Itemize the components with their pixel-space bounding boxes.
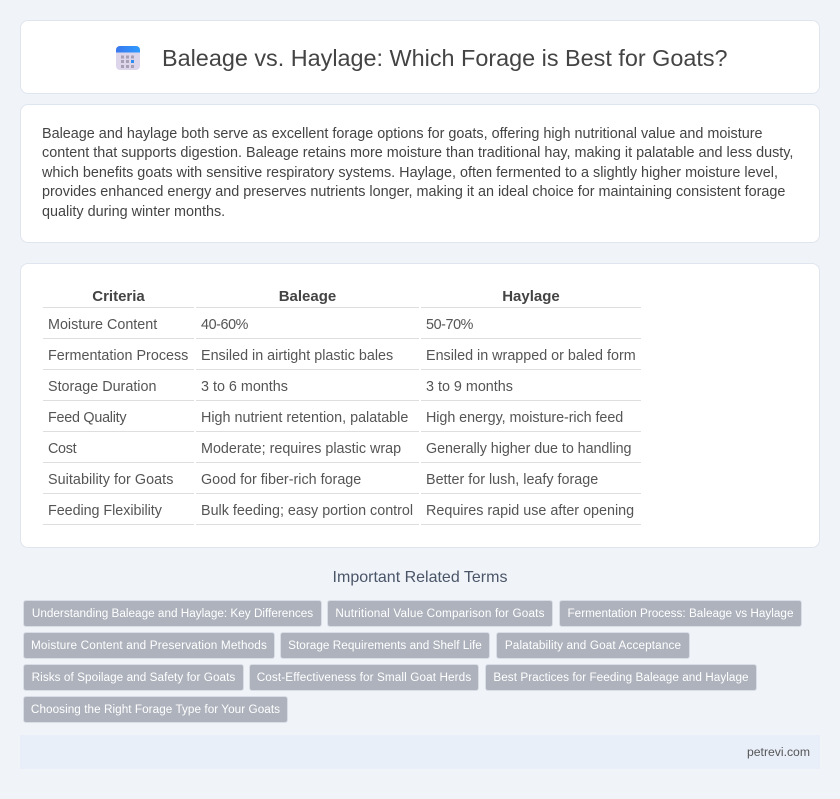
header panel bbox=[20, 20, 820, 94]
related term tags bbox=[23, 600, 802, 723]
comparison table: Feed Quality bbox=[48, 410, 126, 426]
comparison table: 40-60% bbox=[201, 317, 248, 333]
comparison table: Fermentation Process bbox=[48, 348, 188, 364]
panel: intro text bbox=[20, 104, 820, 243]
footer bar bbox=[20, 735, 820, 769]
related term tags: Cost-Effectiveness for Small Goat Herds bbox=[257, 671, 471, 684]
related term tags: Best Practices for Feeding Baleage and Haylage bbox=[493, 671, 749, 684]
intro paragraph: quality during winter months. bbox=[42, 204, 225, 220]
intro paragraph bbox=[42, 126, 793, 220]
comparison table: Cost bbox=[48, 441, 76, 457]
comparison table: Ensiled in wrapped or baled form bbox=[426, 348, 636, 364]
comparison table bbox=[43, 288, 641, 525]
heading: related terms: Important Related Terms bbox=[333, 569, 507, 586]
intro paragraph: Baleage and haylage both serve as excellent forage options for goats, offering high nutritional value and moisture bbox=[42, 126, 763, 142]
comparison table: Ensiled in airtight plastic bales bbox=[201, 348, 393, 364]
comparison table: Baleage bbox=[279, 288, 336, 305]
intro paragraph: which benefits goats with sensitive respiratory systems. Haylage, often fermented to a slightly higher moisture level, bbox=[42, 165, 778, 181]
comparison table: Criteria bbox=[92, 288, 145, 305]
related term tags: Risks of Spoilage and Safety for Goats bbox=[32, 671, 235, 684]
intro paragraph: content that supports digestion. Baleage retains more moisture than traditional hay, making it palatable and less dusty, bbox=[42, 145, 793, 161]
comparison table: Requires rapid use after opening bbox=[426, 503, 634, 519]
comparison table: Suitability for Goats bbox=[48, 472, 173, 488]
comparison table: Good for fiber-rich forage bbox=[201, 472, 361, 488]
panel: comparison table bbox=[20, 263, 820, 548]
comparison table: Better for lush, leafy forage bbox=[426, 472, 598, 488]
comparison table: Generally higher due to handling bbox=[426, 441, 631, 457]
related term tags: Storage Requirements and Shelf Life bbox=[288, 639, 482, 652]
comparison table: Moisture Content bbox=[48, 317, 157, 333]
comparison table: Feeding Flexibility bbox=[48, 503, 162, 519]
comparison table: High energy, moisture-rich feed bbox=[426, 410, 623, 426]
comparison table: High nutrient retention, palatable bbox=[201, 410, 408, 426]
title: Baleage vs. Haylage: Which Forage is Best for Goats? bbox=[162, 45, 728, 71]
icon: calendar bbox=[116, 46, 140, 70]
related term tags: Choosing the Right Forage Type for Your Goats bbox=[31, 703, 280, 716]
related term tags: Moisture Content and Preservation Methods bbox=[31, 639, 267, 652]
intro paragraph: provides enhanced energy and preserves nutrients longer, making it an ideal choice for maintaining consistent forage bbox=[42, 184, 785, 200]
footer credit: petrevi.com bbox=[747, 745, 810, 759]
comparison table: Storage Duration bbox=[48, 379, 156, 395]
comparison table: Bulk feeding; easy portion control bbox=[201, 503, 413, 519]
comparison table: 3 to 6 months bbox=[201, 379, 288, 395]
related term tags: Fermentation Process: Baleage vs Haylage bbox=[568, 607, 793, 620]
comparison table: Haylage bbox=[502, 288, 560, 305]
comparison table: 3 to 9 months bbox=[426, 379, 513, 395]
related term tags: Understanding Baleage and Haylage: Key Differences bbox=[32, 607, 313, 620]
related term tags: Palatability and Goat Acceptance bbox=[505, 639, 681, 652]
comparison table: 50-70% bbox=[426, 317, 473, 333]
comparison table: Moderate; requires plastic wrap bbox=[201, 441, 401, 457]
related term tags: Nutritional Value Comparison for Goats bbox=[335, 607, 545, 620]
